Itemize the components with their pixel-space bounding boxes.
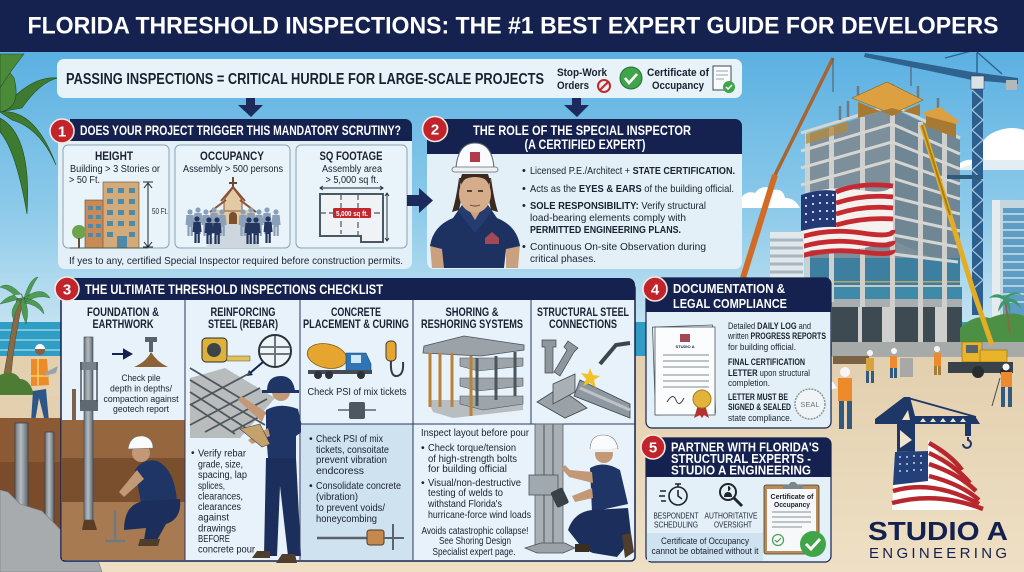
compliance text: Detailed DAILY LOG and (728, 321, 811, 331)
column: structural steel connections: STRUCTURAL STEEL (537, 307, 629, 319)
worker with clipboard (238, 376, 303, 563)
card: square footage: SQ FOOTAGE (320, 149, 382, 163)
panel 5: partner with Studio A (641, 435, 831, 562)
panel 3: inspections checklist: See Shoring Design (439, 536, 511, 547)
panel 4: documentation and legal compliance: 4 (651, 282, 660, 298)
inspector duties list: Continuous On-site Observation during (530, 241, 706, 253)
column: reinforcing steel: grade, size, (198, 460, 243, 470)
compliance text: written PROGRESS REPORTS (727, 331, 826, 341)
compliance text: LETTER MUST BE (728, 392, 788, 402)
lower text: inspection notes: for building official (428, 463, 507, 475)
column: concrete placement and curing: CONCRETE (331, 307, 381, 319)
banner: critical hurdle: Certificate of (647, 67, 709, 79)
compliance text: LETTER upon structural (728, 368, 810, 378)
lower text: inspection notes: Check torque/tension (428, 442, 516, 454)
footer note: special inspector required: If yes to any, certified Special Inspector required before construction permits. (69, 255, 403, 267)
panel 5: partner with Studio A: BESPONDENT (654, 510, 698, 520)
title bar: FLORIDA THRESHOLD INSPECTIONS: THE #1 BEST EXPERT GUIDE FOR DEVELOPERS (28, 12, 998, 40)
banner: critical hurdle: Stop-Work (557, 67, 608, 79)
compliance text: FINAL CERTIFICATION (728, 357, 805, 367)
column: reinforcing steel: REINFORCING (210, 307, 276, 319)
column: concrete placement and curing: Check PSI of mix (316, 433, 384, 445)
card: square footage: Assembly area (322, 164, 382, 175)
orange mobile crane boom (743, 58, 833, 278)
panel 3: inspections checklist: 3 (63, 282, 71, 298)
lower text: inspection notes: of high-strength bolts (428, 453, 517, 465)
panel 3: inspections checklist: Avoids catastrophic collapse! (422, 526, 528, 537)
column: foundation and earthwork: Check pile (122, 373, 160, 384)
icon: seal: SEAL (800, 400, 820, 409)
panel 4: documentation and legal compliance (643, 277, 831, 428)
column: concrete placement and curing: • (309, 480, 313, 492)
column: reinforcing steel: • (191, 448, 195, 459)
banner: critical hurdle: Occupancy (652, 80, 705, 92)
palm tree, beach and shrub lower left (0, 277, 60, 418)
card: square footage: > 5,000 sq ft. (326, 175, 378, 186)
icon: certificate clipboard: Certificate of (770, 492, 814, 501)
lower text: inspection notes: withstand Florida's (427, 498, 502, 510)
lower text: inspection notes: Inspect layout before pour (421, 427, 529, 439)
column: concrete placement and curing: PLACEMENT & CURING (303, 319, 409, 331)
rubble pile bottom left (0, 490, 102, 572)
column: concrete placement and curing: prevent vibration (316, 454, 387, 466)
icon: certification letter (652, 325, 716, 418)
compliance text: state compliance. (728, 413, 792, 423)
tower crane blue (864, 50, 1018, 315)
icon: seal (795, 389, 825, 419)
lower text: inspection notes: • (421, 477, 425, 489)
title bar (0, 0, 1024, 52)
card: height: HEIGHT (95, 149, 134, 163)
inspector duties list (522, 165, 735, 265)
column: reinforcing steel: clearances (198, 502, 241, 513)
column: reinforcing steel: drawings (198, 524, 236, 534)
panel 3: inspections checklist: Specialist expert page. (432, 547, 516, 558)
card: height: > 50 Ft. (69, 175, 100, 186)
inspector duties list: load-bearing elements comply with (530, 212, 686, 224)
column: concrete placement and curing: • (309, 433, 313, 445)
column: reinforcing steel: Verify rebar (198, 448, 247, 460)
column: foundation and earthwork: geotech report (113, 404, 169, 415)
panel 2: role of the special inspector: THE ROLE OF THE SPECIAL INSPECTOR (473, 122, 691, 138)
yellow mobile crane (922, 125, 1013, 378)
banner: critical hurdle: Orders (557, 80, 589, 92)
dividers between columns (185, 300, 635, 560)
lower text: inspection notes: • (421, 442, 425, 454)
inspector duties list: Acts as the EYES & EARS of the building official. (530, 183, 734, 195)
construction workers on site (822, 346, 1012, 429)
inspector duties list: critical phases. (530, 253, 596, 265)
panel 5: partner with Studio A: OVERSIGHT (714, 520, 752, 530)
card: occupancy: OCCUPANCY (200, 149, 264, 163)
logo: Studio A Engineering: STUDIO A (868, 516, 1008, 546)
panel 4: documentation and legal compliance: LEGAL COMPLIANCE (673, 296, 787, 311)
tower building under construction (801, 82, 962, 345)
column: foundation and earthwork (62, 307, 185, 560)
column: reinforcing steel (190, 307, 303, 563)
panel 3: inspections checklist (55, 277, 635, 563)
inspector duties list: SOLE RESPONSIBILITY: Verify structural (530, 200, 706, 212)
banner: critical hurdle (57, 59, 742, 98)
column: reinforcing steel: concrete pour (198, 544, 256, 556)
panel 5: partner with Studio A: STUDIO A ENGINEERING (671, 464, 811, 478)
icon: certification letter: STUDIO A (676, 344, 695, 349)
column: reinforcing steel: spacing, lap (198, 470, 247, 481)
panel 3: inspections checklist: THE ULTIMATE THRESHOLD INSPECTIONS CHECKLIST (85, 281, 383, 297)
arrow: section 1 to section 2 (407, 188, 433, 213)
column: concrete placement and curing: to prevent voids/ (316, 502, 385, 514)
card: square footage: 5,000 sq ft. (336, 209, 368, 218)
column: shoring and reshoring: RESHORING SYSTEMS (421, 319, 523, 331)
figure: special inspector (430, 143, 520, 268)
panel 1: project triggers: DOES YOUR PROJECT TRIGGER THIS MANDATORY SCRUTINY? (80, 122, 401, 138)
icon: magnifier (720, 484, 742, 506)
lower text: inspection notes: testing of welds to (428, 487, 503, 499)
inspector duties list: • (522, 200, 526, 212)
column: reinforcing steel: STEEL (REBAR) (208, 319, 278, 331)
column: reinforcing steel: clearances, (198, 492, 243, 502)
worker kneeling at pile (105, 436, 180, 546)
card: height (63, 145, 169, 248)
palm tree top left (0, 54, 58, 214)
column: shoring and reshoring: SHORING & (446, 307, 498, 319)
icon: stopwatch (659, 484, 687, 505)
column: concrete placement and curing (301, 307, 413, 560)
compliance text (727, 321, 826, 423)
column: foundation and earthwork: EARTHWORK (92, 319, 154, 331)
card: occupancy: Assembly > 500 persons (183, 164, 283, 175)
column: structural steel connections: CONNECTIONS (549, 319, 617, 331)
compliance text: SIGNED & SEALED (728, 402, 791, 412)
panel 1: project triggers (50, 119, 412, 269)
panel 1: project triggers: 1 (58, 124, 66, 140)
panel 4: documentation and legal compliance: DOCUMENTATION & (673, 281, 785, 296)
column: reinforcing steel: BEFORE (198, 534, 230, 545)
column: concrete placement and curing: tickets, consoitate (316, 444, 389, 456)
lower text: inspection notes (421, 427, 531, 521)
steel column with inspector (525, 424, 634, 558)
panel 2: role of the special inspector (422, 116, 742, 269)
inspector duties list: Licensed P.E./Architect + STATE CERTIFICATION. (530, 165, 735, 177)
column: structural steel connections (537, 307, 630, 418)
logo flag (892, 440, 983, 510)
compliance text: completion. (728, 378, 770, 388)
panel 5: partner with Studio A: AUTHORITATIVE (704, 510, 758, 520)
panel 2: role of the special inspector: (A CERTIFIED EXPERT) (524, 136, 646, 152)
column: shoring and reshoring (421, 307, 524, 418)
site worker with laptop left (31, 344, 58, 425)
panel 5: partner with Studio A: PARTNER WITH FLORIDA'S (671, 440, 819, 454)
lower text: inspection notes: Visual/non-destructive (428, 477, 521, 489)
inspector duties list: • (522, 183, 526, 195)
panel 5: partner with Studio A: Certificate of Occupancy (661, 536, 749, 546)
American flag on building (801, 184, 893, 258)
arrow: banner to section 2 (564, 98, 589, 117)
lower text: inspection notes: hurricane-force wind loads (428, 509, 531, 521)
inspector duties list: • (522, 165, 526, 177)
banner: critical hurdle: PASSING INSPECTIONS = CRITICAL HURDLE FOR LARGE-SCALE PROJECTS (66, 71, 544, 88)
inspector duties list: • (522, 241, 526, 253)
icon: certificate clipboard (764, 482, 826, 557)
column: concrete placement and curing: Consolidate concrete (316, 480, 401, 492)
column: foundation and earthwork: FOUNDATION & (87, 307, 159, 319)
column: reinforcing steel: against (198, 512, 229, 524)
panel 5: partner with Studio A: cannot be obtained without it (652, 546, 759, 556)
compliance text: for building official. (728, 342, 796, 352)
logo: Studio A Engineering (868, 397, 1008, 562)
arrow: banner to section 1 (238, 98, 263, 117)
logo: Studio A Engineering: ENGINEERING (869, 545, 1007, 562)
soil cross-section and piles left (0, 418, 62, 553)
column: foundation and earthwork: compaction against (104, 394, 179, 405)
logo crane (875, 397, 980, 454)
panel 2: role of the special inspector: 2 (431, 122, 439, 138)
panel 5: partner with Studio A: 5 (649, 440, 657, 456)
column: concrete placement and curing: (vibration) (316, 491, 358, 503)
panel 5: partner with Studio A: SCHEDULING (654, 520, 698, 530)
card: square footage (296, 145, 407, 248)
small buildings in background (770, 200, 1024, 328)
card: height: 50 Ft. (152, 206, 168, 216)
column: reinforcing steel: splices, (198, 481, 225, 492)
column: concrete placement and curing: endcoress (316, 465, 364, 477)
ground wall, trees and palm at right (832, 292, 1024, 364)
card: occupancy (175, 145, 290, 248)
icon: certificate clipboard: Occupancy (774, 500, 811, 509)
card: height: Building > 3 Stories or (70, 164, 161, 175)
column: concrete placement and curing: honeycombing (316, 513, 377, 525)
column: concrete placement and curing: Check PSI of mix tickets (308, 386, 406, 398)
column: foundation and earthwork: depth in depths/ (110, 384, 172, 394)
panel 5: partner with Studio A: STRUCTURAL EXPERTS - (671, 452, 811, 466)
inspector duties list: PERMITTED ENGINEERING PLANS. (530, 224, 681, 236)
